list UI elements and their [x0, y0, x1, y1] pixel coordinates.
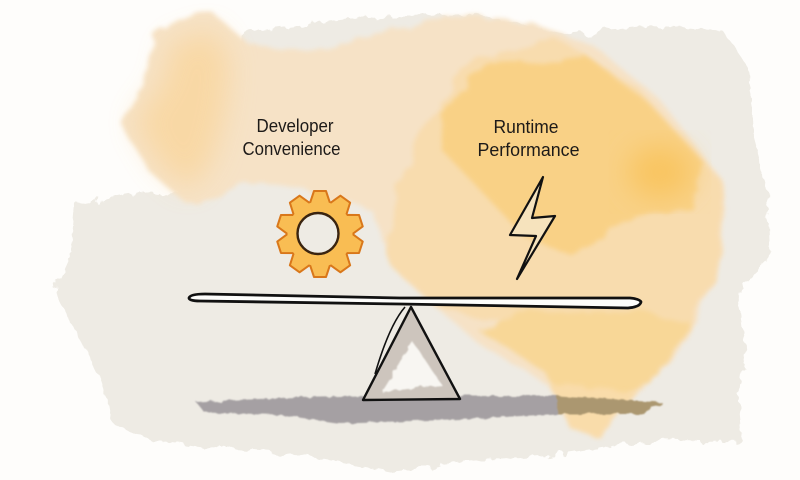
label: Runtime Performance: Runtime [494, 117, 558, 137]
orange wash: left warm patch [135, 30, 230, 190]
seesaw beam [189, 294, 641, 308]
label: Runtime Performance: Performance [478, 140, 580, 160]
orange watercolor wash: light [120, 12, 724, 437]
ground shadow [196, 396, 662, 423]
icon: gear [276, 191, 364, 277]
label: Runtime Performance [478, 117, 580, 160]
label: Developer Convenience [242, 116, 340, 159]
orange wash: bottom tail [550, 385, 640, 438]
dark hot spot [628, 146, 692, 198]
orange wash: dark upper patch [440, 58, 705, 256]
icon: lightning bolt [510, 177, 555, 279]
label: Developer Convenience: Convenience [242, 139, 340, 159]
label: Developer Convenience: Developer [256, 116, 334, 136]
orange wash: mid tone upper band [390, 40, 722, 330]
fulcrum triangle [363, 307, 460, 400]
orange wash: lower patch [478, 312, 690, 402]
